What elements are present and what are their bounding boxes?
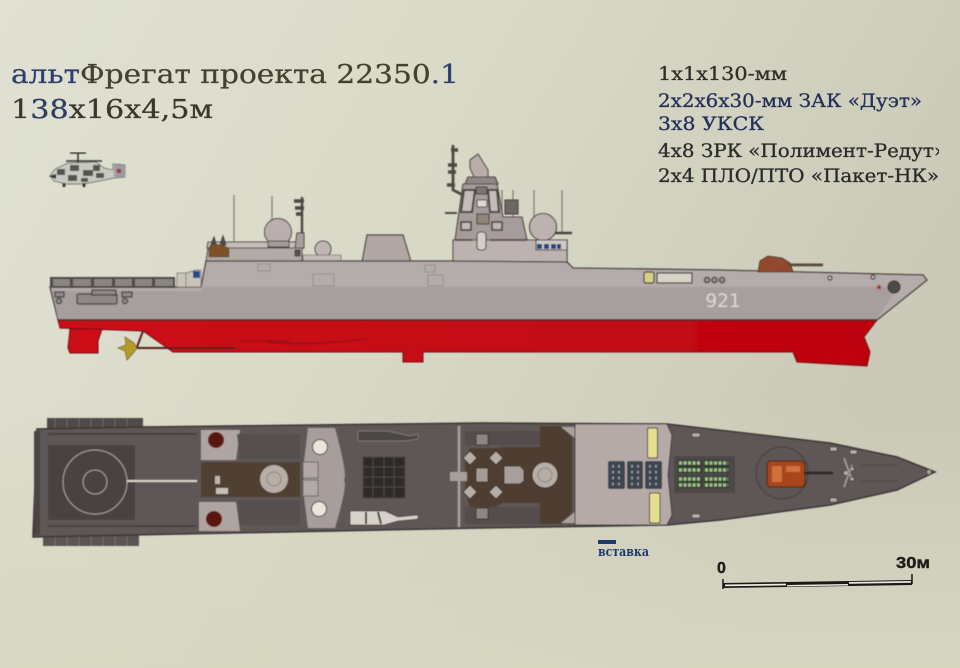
rear superstructure [206,218,341,261]
brown aft deck [201,462,300,497]
armament list: 2х4 ПЛО/ПТО «Пакет-НК» [658,166,939,187]
light triangles [561,427,575,523]
stern deck block [50,277,175,288]
boat: upper [358,431,418,441]
armament list: 4х8 ЗРК «Полимент-Редут» [658,141,946,162]
armament list: 2х2х6х30-мм ЗАК «Дуэт» [658,91,922,112]
central missile grid [363,457,405,498]
main mast tower [453,154,572,262]
yellow hatches [648,428,660,523]
light VLS deck [575,424,672,525]
bulkhead [458,426,460,527]
title: 138х16х4,5м [11,94,213,125]
faint hull panels [258,264,443,286]
legend: insert [598,540,649,560]
armament list: 1х1х130-мм [658,64,787,85]
aft turret panels [199,430,300,531]
boat: lower [350,511,418,525]
midship light panel [303,428,345,528]
red underwater hull [58,320,877,366]
scale bar: 0 [717,560,726,577]
upper stern sponson [47,418,143,430]
hull number: 921 [705,291,741,312]
stack [362,235,411,262]
stern equipment [55,290,132,304]
rudder [68,329,102,353]
scale bar [717,555,930,589]
helipad [37,431,197,535]
antennas and masts [234,145,562,248]
bow fittings [692,433,932,518]
armament list [658,64,946,187]
deck outline [33,423,935,537]
side view of the ship [50,145,927,366]
propeller shaft [118,331,368,360]
lower stern sponson [43,535,139,546]
scale bar: 30м [896,555,930,572]
title: альт Фрегат проекта 22350 .1 [11,59,459,90]
red star: ★ [875,283,883,293]
top view of the ship [33,418,935,546]
bow gun [758,256,823,272]
main gun plan [756,447,833,499]
forward turret disc [532,462,558,488]
bridge windows [537,244,561,249]
legend: insert: вставка [598,545,649,560]
icon: helicopter [49,153,125,187]
title [11,59,459,125]
armament list: 3х8 УКСК [658,114,765,135]
hexagon launcher group [450,434,524,519]
dark side strips [465,431,540,524]
hull shaded band [52,287,898,319]
brown forward deck [465,426,572,524]
UKSK cells [608,461,662,489]
grey hull [50,261,927,320]
green launcher block [674,456,735,493]
bow deck fittings [644,272,900,293]
